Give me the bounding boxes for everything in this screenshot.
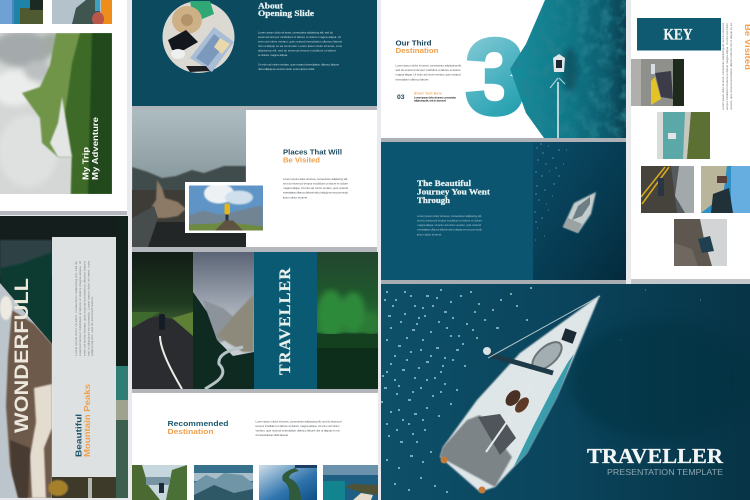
text block: recommended lorem	[256, 420, 342, 437]
photo: road with yellow lines	[641, 166, 694, 213]
photo: small traveller left	[0, 0, 43, 24]
text block: about lorem: nisi ut aliquip ex ea commodo. Lorem ipsum dolor sit amet, cons	[258, 44, 342, 48]
heading: the beautiful journey: Journey You Went	[417, 188, 490, 196]
panel: traveller cover slide	[380, 284, 750, 500]
text block: wonderfull lorem: eiusmod tempor incididunt ut labore et dolore magna aliqua. Ut	[78, 261, 82, 356]
panel: our third destination	[381, 0, 626, 142]
text block: journey lorem: magna aliqua. Ut enim ad minim veniam, quis nostrud	[417, 223, 481, 227]
heading: beautiful mountain peaks	[74, 384, 92, 457]
heading: our third destination: Destination	[396, 46, 439, 55]
heading: recommended destination	[168, 419, 229, 436]
subtitle: presentation template: PRESENTATION TEMPLATE	[607, 468, 723, 477]
heading: places that will be visited	[283, 148, 342, 164]
text block: third lorem: Lorem ipsum dolor sit amet, consectetur adipiscing elit,	[396, 64, 462, 68]
heading: beautiful mountain peaks: Beautiful	[74, 414, 84, 457]
photo: rocky mountains	[194, 465, 253, 500]
photo: hiker on coast	[132, 465, 187, 500]
heading: places that will be visited: Places That Will	[283, 148, 342, 156]
panel: wonderfull slide	[0, 216, 128, 498]
short text here: Short Text Here	[414, 92, 442, 96]
short text here: adipiscing elit, sed do eiusmod	[414, 100, 447, 102]
heading: about opening slide	[258, 2, 314, 18]
heading: recommended destination: Destination	[168, 427, 214, 436]
text block: rotated lorem: tempor incididunt ut labore et dolore magna aliqua. Ut enim ad minim	[725, 22, 729, 110]
teal band	[254, 252, 317, 389]
boat hull	[440, 295, 600, 492]
title: my trip my adventure	[80, 117, 100, 180]
text block: rotated lorem	[721, 22, 733, 110]
photo: climber in yellow	[631, 59, 684, 106]
heading: our third destination: Our Third	[396, 38, 432, 48]
text block: journey lorem	[417, 214, 482, 236]
heading: beautiful mountain peaks: Mountain Peaks	[82, 384, 92, 457]
photo: person in yellow coat inset	[185, 182, 264, 233]
text block: third lorem: magna aliqua. Ut enim ad minim veniam, quis nostrud	[396, 72, 461, 76]
text block: recommended lorem: commodo ipsum dolor sit amet.	[256, 433, 289, 437]
text block: wonderfull lorem: Lorem ipsum dolor sit amet, consectetur adipiscing elit, sed do	[74, 261, 78, 356]
photo: mountain and clouds	[0, 33, 112, 194]
heading: the beautiful journey	[417, 179, 490, 205]
heading: the beautiful journey: The Beautiful	[417, 179, 472, 188]
short text here	[414, 92, 456, 102]
panel: recommended destination	[132, 389, 378, 500]
text block: recommended lorem: veniam, quis nostrud exercitation ullamco laboris nisi ut aliquip ex ea	[256, 428, 340, 432]
text block: wonderfull lorem: nisi ut aliquip ex ea commodo. Lorem ipsum dolor sit amet, cons	[86, 260, 90, 356]
text block: about lorem: adipiscing elit, sed do eiusmod tempor incididunt ut labore	[258, 48, 336, 52]
text block: places lorem: exercitation ullamco laboris nisi ut aliquip ex ea commodo	[283, 190, 348, 194]
photo: couple by the sea	[701, 166, 750, 213]
title: traveller cover: TRAVELLER	[587, 444, 724, 468]
text block: places lorem: sed do eiusmod tempor incididunt ut labore et dolore	[283, 182, 348, 186]
panel: about opening slide	[132, 0, 377, 110]
text block: about lorem: et dolore magna aliqua.	[258, 53, 288, 57]
heading: our third destination	[396, 38, 439, 55]
text block: places lorem: magna aliqua. Ut enim ad minim veniam, quis nostrud	[283, 186, 348, 190]
photo: man on rock	[674, 219, 727, 266]
photo: aerial sailboat on deep water	[381, 284, 750, 500]
text block: about lorem: nisi ut aliquip ex ea commodo. Lorem ipsum dolor.	[258, 67, 315, 71]
short text here: Lorem ipsum dolor sit amet, consectetur	[414, 96, 456, 100]
title: my trip my adventure: My Trip	[80, 147, 90, 180]
text block: recommended lorem: tempor incididunt ut labore et dolore magna aliqua. Ut enim ad minim	[256, 424, 340, 428]
title: traveller vertical: TRAVELLER	[277, 268, 294, 375]
key heading box: KEY	[664, 26, 692, 44]
photo: aerial boat dark water	[533, 142, 626, 280]
title: wonderfull: WONDERFULL	[11, 278, 33, 433]
text block: places lorem: Lorem ipsum dolor sit amet, consectetur adipiscing elit,	[283, 177, 348, 181]
photo: circular travel flat lay	[162, 1, 234, 73]
text block: journey lorem: sed do eiusmod tempor incididunt ut labore et dolore	[417, 218, 482, 222]
photo: mountain and lake	[0, 216, 128, 498]
heading: about opening slide: About	[258, 2, 283, 10]
panel: beautiful journey slide	[381, 142, 626, 284]
key heading box	[637, 18, 721, 50]
photo: coastal headland	[323, 465, 378, 500]
translucent text panel	[52, 237, 116, 477]
text block: journey lorem: ipsum dolor sit amet.	[417, 232, 442, 236]
text block: rotated lorem: Lorem ipsum dolor sit amet, consectetur adipiscing elit, sed do eiusmod	[721, 23, 725, 110]
text block: third lorem	[396, 64, 462, 82]
photo: forest reflected in lake	[317, 252, 378, 389]
photo: green island in blue water	[259, 465, 317, 500]
big numeral 3: 3	[465, 16, 525, 137]
photo: canyon river	[193, 252, 254, 389]
text block: journey lorem: Lorem ipsum dolor sit amet, consectetur adipiscing elit,	[417, 214, 482, 218]
text block: places lorem	[283, 177, 348, 200]
text block: about lorem: enim ad minim veniam, quis nostrud exercitation ullamco laboris	[258, 40, 342, 44]
number 03: 03	[397, 94, 405, 101]
panel: traveller photo strip	[132, 252, 379, 389]
heading: the beautiful journey: Through	[417, 196, 450, 205]
text block: wonderfull lorem: adipiscing elit, sed do eiusmod tempor.	[90, 296, 94, 356]
text block: journey lorem: exercitation ullamco laboris nisi ut aliquip ex ea commodo	[417, 228, 482, 232]
photo: aerial speedboat on sea	[505, 0, 626, 138]
text block: third lorem: sed do eiusmod tempor incididunt ut labore et dolore	[396, 68, 461, 72]
text block: about lorem: eiusmod tempor incididunt ut labore et dolore magna aliqua. Ut	[258, 35, 341, 39]
photo: small traveller right	[52, 0, 112, 24]
text block: rotated lorem: veniam, quis nostrud exercitation ullamco laboris nisi ut aliquip ex ea	[729, 23, 733, 110]
text block: wonderfull lorem: enim ad minim veniam, quis nostrud exercitation ullamco laboris	[82, 260, 86, 356]
text block: about lorem: Ut enim ad minim veniam, quis nostrud exercitation ullamco laboris	[258, 62, 340, 66]
photo: skateboarder on road	[132, 252, 193, 389]
text block: places lorem: ipsum dolor sit amet.	[283, 196, 308, 200]
text block: about lorem: Lorem ipsum dolor sit amet, consectetur adipiscing elit, sed do	[258, 30, 333, 34]
panel: my trip slide	[0, 0, 127, 215]
heading: about opening slide: Opening Slide	[258, 9, 314, 18]
text block: about lorem	[258, 30, 342, 71]
panel: places that will be visited	[132, 110, 377, 252]
title: my trip my adventure: My Adventure	[90, 117, 100, 180]
panel: key slide	[631, 0, 750, 284]
heading: recommended destination: Recommended	[168, 419, 229, 428]
text block: recommended lorem: Lorem ipsum dolor sit amet, consectetur adipiscing elit, sed do eiusmod	[256, 420, 342, 424]
photo: swimmer and shore	[657, 112, 710, 159]
heading: places that will be visited: Be Visited	[283, 156, 320, 164]
photo: hand and misty mountains	[132, 110, 246, 247]
text block: third lorem: exercitation ullamco laboris	[396, 78, 429, 82]
text block: wonderfull lorem	[74, 260, 94, 356]
